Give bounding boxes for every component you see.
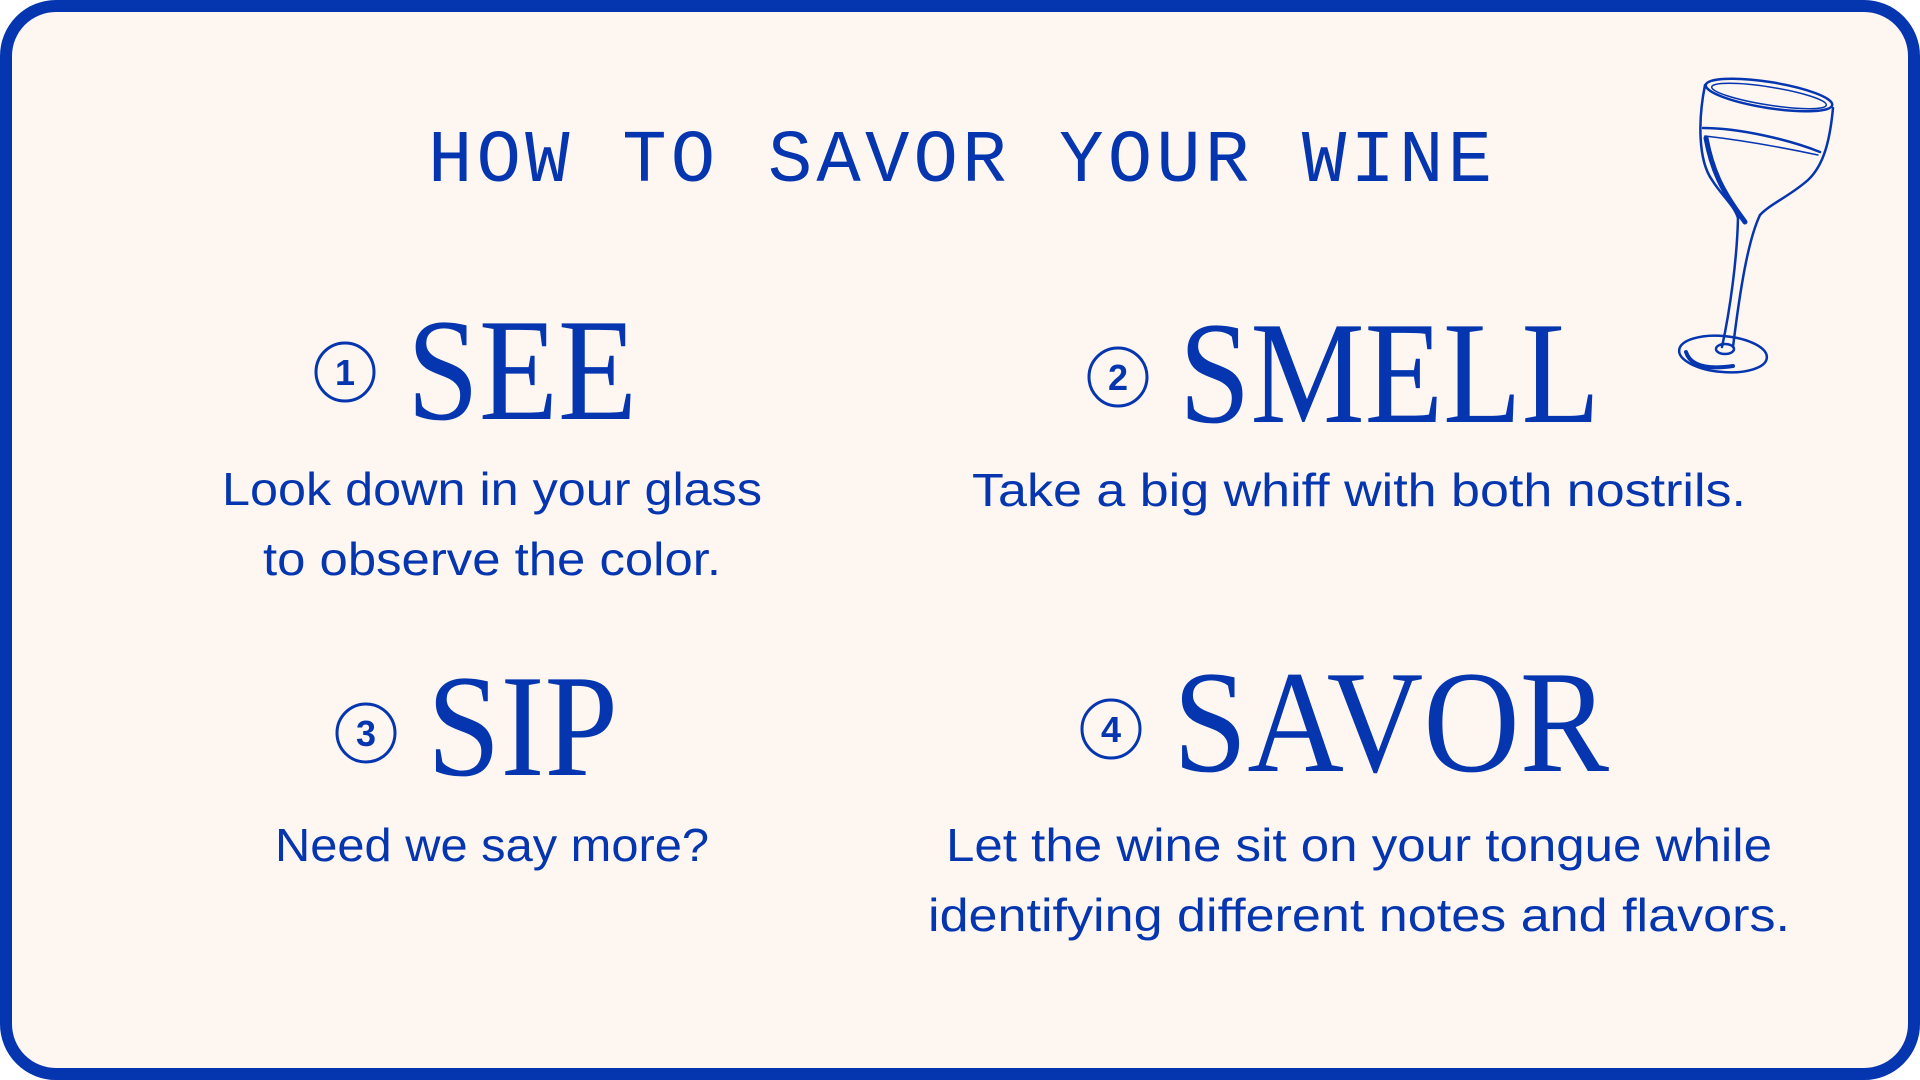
icon: number 2 circle: 2 (1108, 357, 1128, 398)
step 3: SIP (275, 645, 709, 871)
text: savor description: Let the wine sit on your tongue while (946, 819, 1772, 871)
icon: wine glass (1678, 72, 1834, 376)
icon: number 4 circle (1082, 700, 1140, 758)
step 4: SAVOR (928, 641, 1790, 941)
heading: SIP: SIP (427, 645, 618, 807)
text: smell description: Take a big whiff with both nostrils. (972, 464, 1746, 516)
icon: number 2 circle (1089, 348, 1147, 406)
heading: SEE: SEE (407, 289, 637, 451)
icon: number 1 circle (316, 343, 374, 401)
icon: number 3 circle (337, 704, 395, 762)
text: see description: Look down in your glass (222, 463, 762, 515)
icon: number 4 circle: 4 (1101, 709, 1121, 750)
step 1: SEE: to observe the color. (263, 533, 721, 585)
title: HOW TO SAVOR YOUR WINE (428, 120, 1492, 204)
step 4: SAVOR: identifying different notes and flavors. (928, 889, 1790, 941)
step 1: SEE (222, 289, 762, 585)
heading: SAVOR: SAVOR (1173, 641, 1610, 803)
text: sip description: Need we say more? (275, 819, 709, 871)
step 2: SMELL (972, 292, 1746, 516)
icon: number 1 circle: 1 (335, 352, 355, 393)
heading: SMELL: SMELL (1179, 292, 1600, 454)
icon: number 3 circle: 3 (356, 713, 376, 754)
